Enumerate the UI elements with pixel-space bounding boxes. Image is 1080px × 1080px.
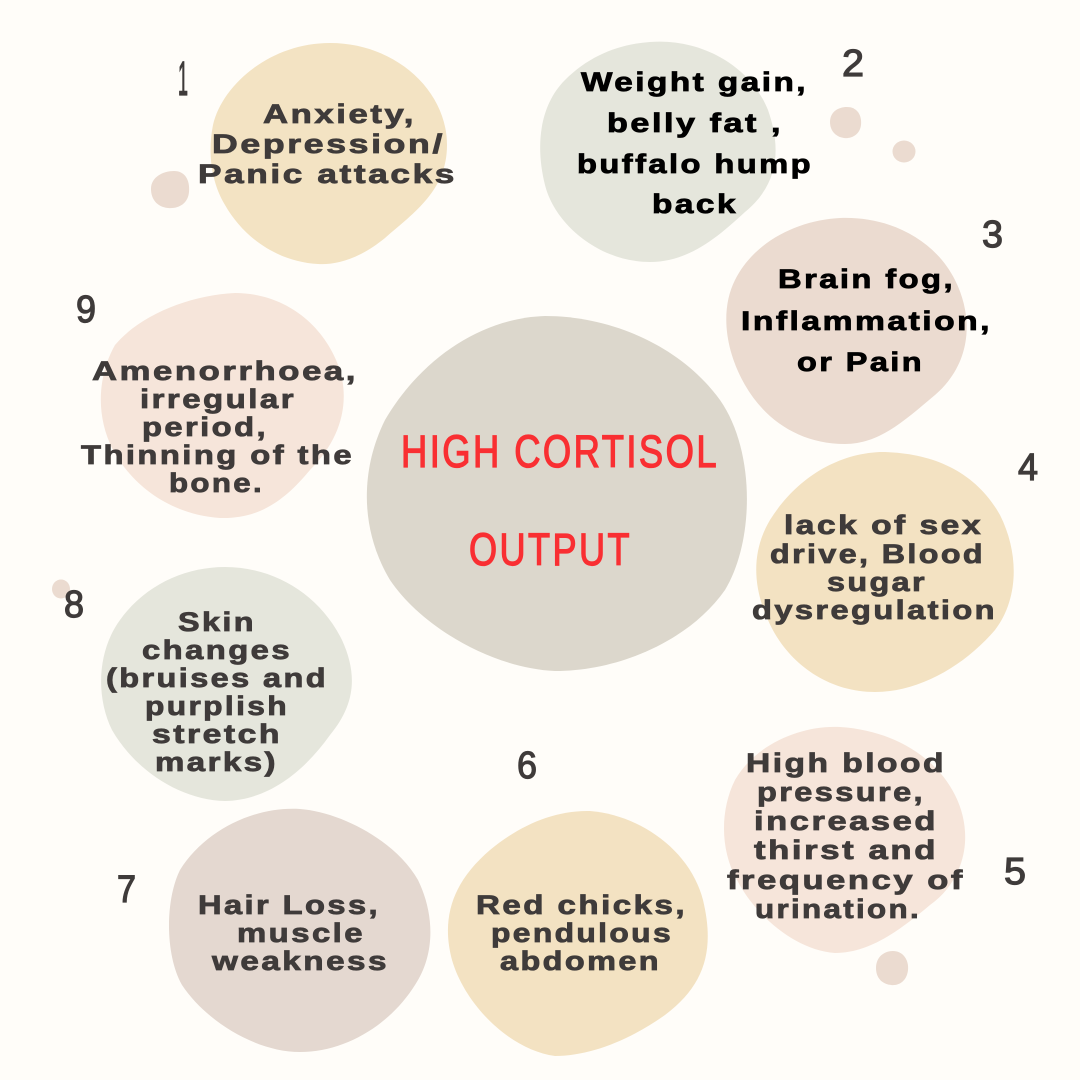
- panel 5: blood pressure: pressure,: [757, 777, 925, 807]
- heading: high cortisol output: [401, 426, 719, 575]
- panel 1: anxiety: Anxiety,: [263, 99, 416, 129]
- number 3: 3: [982, 214, 1003, 256]
- panel 8: skin changes: stretch: [152, 719, 282, 749]
- panel 9: amenorrhoea: Thinning of the: [81, 440, 354, 470]
- panel 3: brain fog: Brain fog,: [778, 264, 955, 294]
- panel 1: anxiety: Panic attacks: [198, 159, 457, 189]
- panel 9: amenorrhoea: period,: [142, 412, 268, 442]
- panel 5: blood pressure: frequency of: [727, 865, 965, 895]
- number 6: 6: [517, 745, 537, 787]
- panel 2: weight gain: back: [652, 189, 738, 219]
- panel 7: hair loss: muscle: [237, 918, 365, 948]
- panel 7: hair loss: [169, 809, 430, 1052]
- panel 9: amenorrhoea: [81, 293, 358, 518]
- panel 3: brain fog: Inflammation,: [741, 306, 992, 336]
- panel 5: blood pressure: urination.: [755, 894, 921, 924]
- panel 8: skin changes: changes: [142, 635, 292, 665]
- panel 4: sex drive and blood sugar: lack of sex: [784, 510, 983, 540]
- infographic canvas: 1: [178, 53, 188, 106]
- heading: high cortisol output: HIGH CORTISOL: [401, 426, 719, 477]
- panel 8: skin changes: Skin: [178, 607, 256, 637]
- panel 6: red cheeks: pendulous: [491, 918, 673, 948]
- panel 5: blood pressure: thirst and: [754, 835, 938, 865]
- panel 7: hair loss: weakness: [211, 946, 389, 976]
- heading: high cortisol output: OUTPUT: [469, 524, 632, 575]
- panel 6: red cheeks: abdomen: [500, 946, 661, 976]
- number 7: 7: [117, 869, 136, 911]
- panel 4: sex drive and blood sugar: drive, Blood: [770, 539, 985, 569]
- panel 8: skin changes: purplish: [145, 691, 289, 721]
- panel 2: weight gain: [540, 42, 813, 262]
- panel 1: anxiety: [198, 43, 457, 264]
- panel 4: sex drive and blood sugar: sugar: [827, 567, 927, 597]
- panel 8: skin changes: [101, 567, 352, 801]
- panel 2: weight gain: Weight gain,: [581, 67, 808, 97]
- panel: center high cortisol output: [367, 316, 747, 671]
- panel 9: amenorrhoea: bone.: [169, 468, 264, 498]
- panel 5: blood pressure: increased: [754, 806, 938, 836]
- panel 6: red cheeks: [448, 811, 708, 1056]
- panel 4: sex drive and blood sugar: dysregulation: [752, 595, 997, 625]
- number 9: 9: [76, 289, 96, 331]
- panel 6: red cheeks: Red chicks,: [476, 890, 687, 920]
- panel 5: blood pressure: High blood: [746, 748, 946, 778]
- number 2: 2: [842, 43, 864, 85]
- panel 9: amenorrhoea: irregular: [140, 384, 296, 414]
- number 8: 8: [64, 584, 84, 626]
- panel 5: blood pressure: [724, 727, 965, 953]
- panel 8: skin changes: (bruises and: [106, 663, 328, 693]
- panel 7: hair loss: Hair Loss,: [198, 890, 380, 920]
- panel 9: amenorrhoea: Amenorrhoea,: [92, 356, 358, 386]
- panel 2: weight gain: belly fat ,: [607, 108, 783, 138]
- panel 3: brain fog: or Pain: [797, 347, 924, 377]
- panel 1: anxiety: Depression/: [212, 129, 445, 159]
- decorative dots: [52, 107, 916, 985]
- number 5: 5: [1004, 851, 1026, 893]
- number 4: 4: [1018, 447, 1038, 489]
- panel 2: weight gain: buffalo hump: [577, 149, 813, 179]
- panel 3: brain fog: [726, 218, 992, 444]
- panel 8: skin changes: marks): [155, 747, 278, 777]
- panel 4: sex drive and blood sugar: [752, 452, 1014, 692]
